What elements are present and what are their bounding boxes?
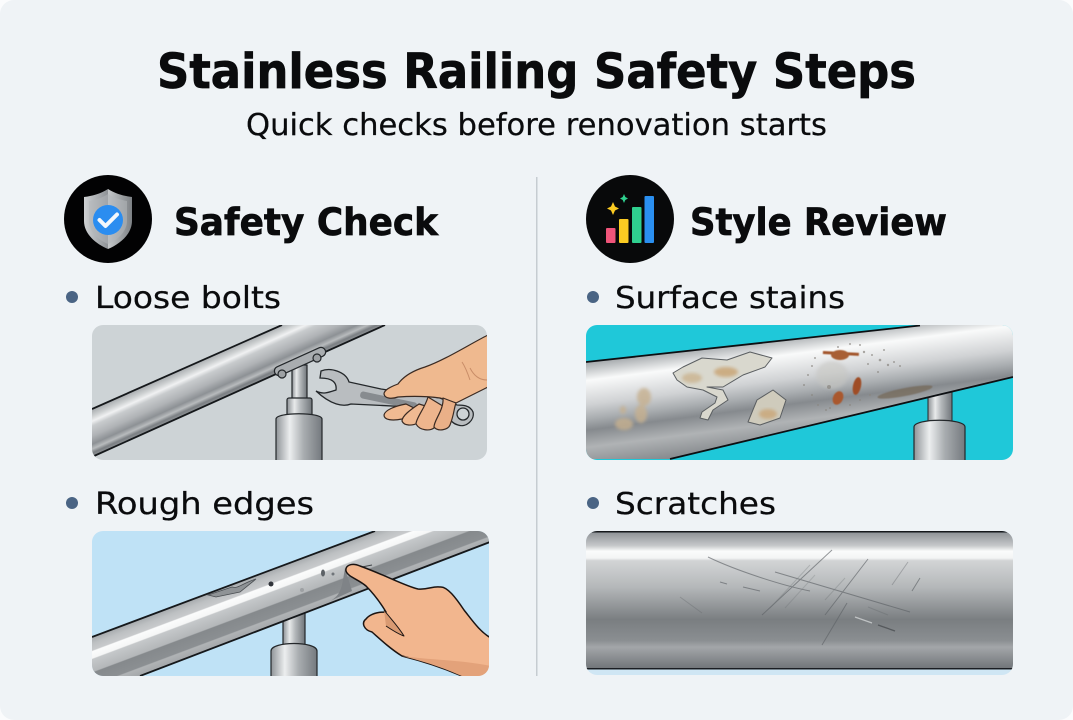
railing tube [92, 325, 385, 457]
railing tube [586, 532, 1013, 669]
title: Stainless Railing Safety Steps [157, 44, 916, 100]
support post [271, 612, 317, 677]
illustration: stained rail [586, 325, 1013, 461]
panel: safety check column [64, 175, 491, 677]
mounting bracket with bolts [278, 352, 321, 378]
bullet: loose bolts: Loose bolts [95, 281, 281, 316]
wrench [316, 370, 473, 426]
illustration: wrench on loose bolts [92, 325, 488, 461]
illustration: scratched rail [586, 531, 1013, 675]
panel: style review column [586, 175, 1013, 675]
column divider [536, 177, 538, 676]
bullet: rough edges: Rough edges [95, 487, 314, 522]
heading: style review: Style Review [690, 201, 947, 244]
support post [276, 365, 322, 461]
icon: bar chart with sparkles [586, 175, 674, 263]
hand holding wrench [384, 335, 488, 430]
heading: safety check: Safety Check [174, 201, 439, 244]
illustration: finger on rough edge [92, 531, 491, 677]
bullet: surface stains: Surface stains [615, 281, 845, 316]
pointing hand [346, 564, 491, 677]
support post [914, 388, 965, 461]
railing tube [92, 531, 490, 676]
bullet: scratches: Scratches [615, 487, 776, 522]
icon: shield with check [64, 175, 152, 263]
railing tube [586, 325, 1013, 459]
scratches [680, 550, 920, 645]
stains [615, 343, 933, 430]
subtitle: Quick checks before renovation starts [246, 108, 827, 143]
